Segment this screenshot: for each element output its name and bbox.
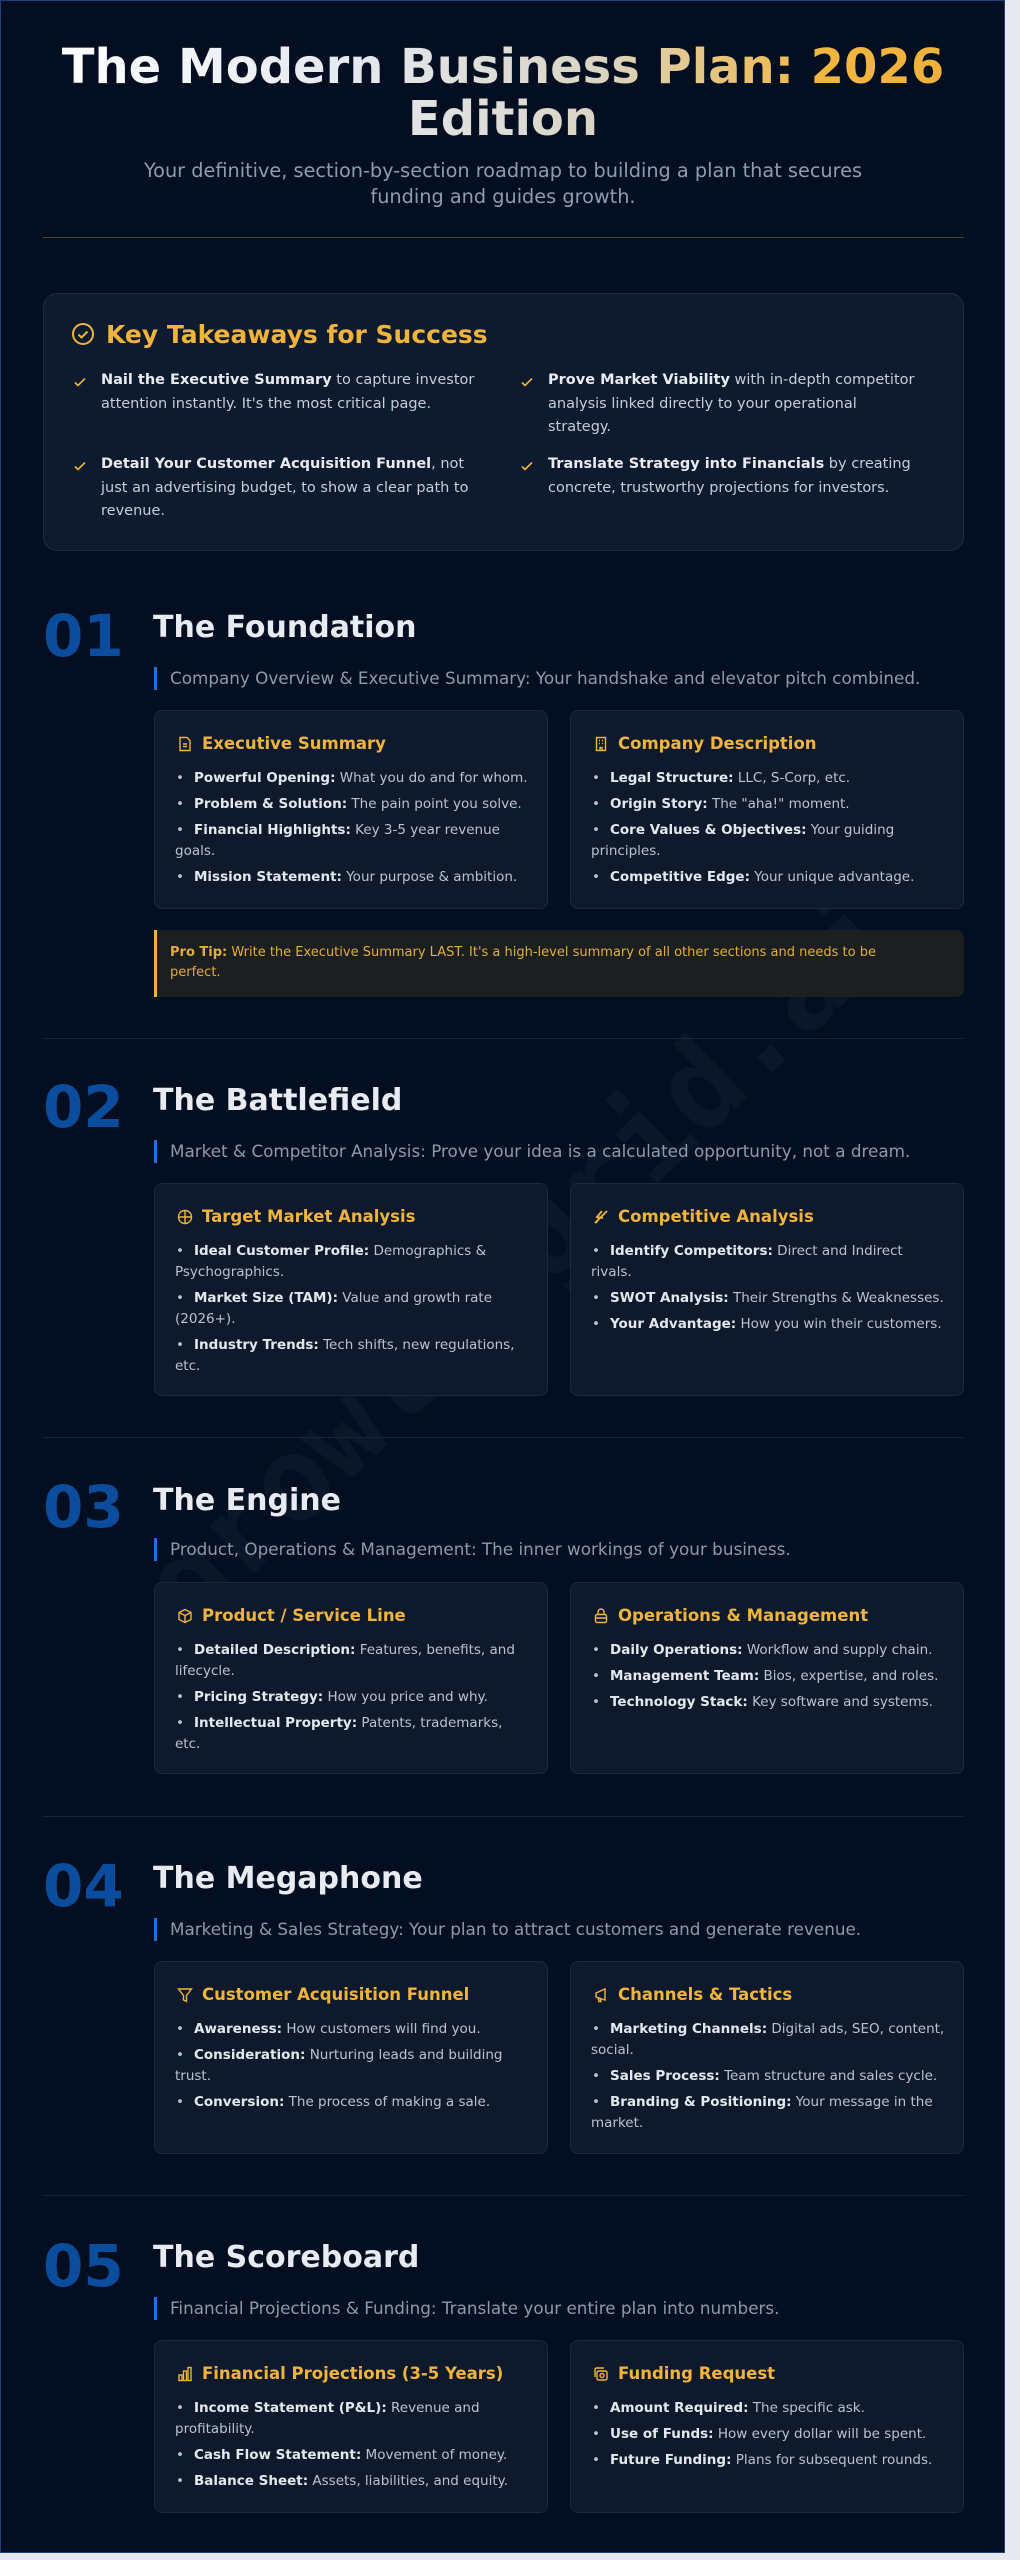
card: channels & tactics: Channels & Tactics (618, 1985, 792, 2004)
card: funding request: Use of Funds: How every dollar will be spent. (610, 2426, 926, 2442)
card: company description: • (592, 869, 600, 885)
card: target market analysis: etc. (175, 1358, 200, 1374)
subtitle (144, 159, 862, 208)
card: competitive analysis: rivals. (591, 1264, 632, 1280)
callout: pro tip: Pro Tip: Write the Executive Summary LAST. It's a high-level summary of all other sections and needs to be (170, 945, 876, 960)
section subtitle 01: Company Overview & Executive Summary: Your handshake and elevator pitch combined. (170, 668, 920, 688)
takeaway 4: concrete, trustworthy projections for investors. (548, 480, 889, 496)
card: financial projections: Balance Sheet: Assets, liabilities, and equity. (194, 2473, 508, 2489)
card: company description: • (592, 770, 600, 786)
card: target market analysis: Market Size (TAM): Value and growth rate (194, 1290, 492, 1306)
number 04: 04 (43, 1852, 124, 1920)
card: competitive analysis: Competitive Analysis (618, 1207, 814, 1226)
callout: pro tip: perfect. (170, 965, 221, 980)
card: executive summary: goals. (175, 843, 215, 859)
card: product / service line: • (176, 1642, 184, 1658)
card: funding request: • (592, 2400, 600, 2416)
card: operations & management: Technology Stack: Key software and systems. (610, 1694, 933, 1710)
takeaway 3 (74, 456, 468, 519)
title (41, 41, 965, 145)
section subtitle 05: Financial Projections & Funding: Translate your entire plan into numbers. (170, 2298, 780, 2318)
card: product / service line: Intellectual Property: Patents, trademarks, (194, 1715, 502, 1731)
card: funding request: Funding Request (618, 2364, 775, 2383)
card: competitive analysis: • (592, 1316, 600, 1332)
card: customer acquisition funnel: • (176, 2047, 184, 2063)
number 01: 01 (43, 602, 124, 670)
card: target market analysis: Ideal Customer Profile: Demographics & (194, 1243, 486, 1259)
takeaway 2: strategy. (548, 419, 611, 435)
section subtitle 02: Market & Competitor Analysis: Prove your idea is a calculated opportunity, not a dream. (170, 1141, 910, 1161)
title: The Modern Business Plan: 2026 (62, 39, 944, 95)
card: operations & management (570, 1582, 964, 1774)
heading: The Engine: The Engine (153, 1483, 341, 1518)
card: funding request: • (592, 2452, 600, 2468)
card: operations & management: • (592, 1668, 600, 1684)
card: channels & tactics: • (592, 2068, 600, 2084)
subtitle: funding and guides growth. (370, 185, 636, 208)
title: Edition (408, 91, 598, 147)
card: channels & tactics: • (592, 2021, 600, 2037)
card: company description (570, 710, 964, 909)
takeaway 2 (522, 372, 914, 435)
callout: pro tip (154, 930, 964, 997)
takeaway 4 (522, 456, 911, 496)
section subtitle 04: Marketing & Sales Strategy: Your plan to attract customers and generate revenue. (170, 1919, 861, 1939)
card: company description: Legal Structure: LLC, S-Corp, etc. (610, 770, 850, 786)
number 02: 02 (43, 1073, 124, 1141)
card: financial projections: profitability. (175, 2421, 255, 2437)
card: company description: principles. (591, 843, 661, 859)
card: customer acquisition funnel: • (176, 2021, 184, 2037)
card: product / service line (154, 1582, 548, 1774)
card: product / service line: Pricing Strategy: How you price and why. (194, 1689, 488, 1705)
card: financial projections: Cash Flow Statement: Movement of money. (194, 2447, 507, 2463)
card: financial projections: • (176, 2447, 184, 2463)
card: customer acquisition funnel: Awareness: How customers will find you. (194, 2021, 481, 2037)
takeaway 2: Prove Market Viability with in-depth competitor (548, 372, 914, 388)
subtitle: Your definitive, section-by-section roadmap to building a plan that secures (144, 159, 862, 182)
card: executive summary: Financial Highlights: Key 3-5 year revenue (194, 822, 500, 838)
takeaway 3: just an advertising budget, to show a clear path to (101, 480, 468, 496)
card: company description: Company Description (618, 734, 817, 753)
card: target market analysis (154, 1183, 548, 1396)
takeaway 3: revenue. (101, 503, 165, 519)
card: competitive analysis: • (592, 1243, 600, 1259)
card: target market analysis: • (176, 1337, 184, 1353)
card: target market analysis: Psychographics. (175, 1264, 284, 1280)
card: financial projections (154, 2340, 548, 2513)
card: financial projections: Financial Projections (3-5 Years) (202, 2364, 503, 2383)
heading: The Scoreboard: The Scoreboard (153, 2240, 419, 2275)
card: customer acquisition funnel: Conversion: The process of making a sale. (194, 2094, 490, 2110)
card: operations & management: Daily Operations: Workflow and supply chain. (610, 1642, 932, 1658)
card: operations & management: • (592, 1694, 600, 1710)
card: operations & management: • (592, 1642, 600, 1658)
section subtitle 03: Product, Operations & Management: The inner workings of your business. (170, 1539, 791, 1559)
card: target market analysis: Industry Trends: Tech shifts, new regulations, (194, 1337, 514, 1353)
card: target market analysis: • (176, 1290, 184, 1306)
card: executive summary: • (176, 770, 184, 786)
card: competitive analysis: Identify Competitors: Direct and Indirect (610, 1243, 903, 1259)
card: company description: Competitive Edge: Your unique advantage. (610, 869, 914, 885)
card: financial projections: • (176, 2400, 184, 2416)
card: executive summary: • (176, 869, 184, 885)
takeaway 1: Nail the Executive Summary to capture investor (101, 372, 474, 388)
heading: key takeaways: Key Takeaways for Success (106, 320, 488, 349)
watermark: growth-grid.ai (115, 864, 926, 1654)
card: customer acquisition funnel: Customer Acquisition Funnel (202, 1985, 469, 2004)
takeaway 1: attention instantly. It's the most critical page. (101, 396, 431, 412)
card: customer acquisition funnel: trust. (175, 2068, 211, 2084)
heading: The Megaphone: The Megaphone (153, 1861, 423, 1896)
card: target market analysis: (2026+). (175, 1311, 236, 1327)
number 03: 03 (43, 1473, 124, 1541)
card: company description: Origin Story: The "aha!" moment. (610, 796, 850, 812)
card: operations & management: Operations & Management (618, 1606, 868, 1625)
card: company description: • (592, 822, 600, 838)
card: funding request: Amount Required: The specific ask. (610, 2400, 865, 2416)
card: competitive analysis: SWOT Analysis: Their Strengths & Weaknesses. (610, 1290, 944, 1306)
card: customer acquisition funnel: • (176, 2094, 184, 2110)
card: channels & tactics: social. (591, 2042, 634, 2058)
card: customer acquisition funnel: Consideration: Nurturing leads and building (194, 2047, 502, 2063)
takeaway 1 (74, 372, 474, 412)
card: executive summary: Problem & Solution: The pain point you solve. (194, 796, 522, 812)
card: product / service line: Product / Service Line (202, 1606, 406, 1625)
card: financial projections: • (176, 2473, 184, 2489)
card: product / service line: • (176, 1689, 184, 1705)
card: channels & tactics: Sales Process: Team structure and sales cycle. (610, 2068, 937, 2084)
takeaway 3: Detail Your Customer Acquisition Funnel, not (101, 456, 464, 472)
card: company description: Core Values & Objectives: Your guiding (610, 822, 894, 838)
panel: key takeaways (43, 293, 964, 551)
card: competitive analysis (570, 1183, 964, 1396)
card: channels & tactics: market. (591, 2115, 643, 2131)
card: executive summary: • (176, 796, 184, 812)
card: funding request: Future Funding: Plans for subsequent rounds. (610, 2452, 932, 2468)
card: target market analysis: Target Market Analysis (202, 1207, 415, 1226)
card: funding request: • (592, 2426, 600, 2442)
card: channels & tactics: Branding & Positioning: Your message in the (610, 2094, 933, 2110)
card: executive summary: Mission Statement: Your purpose & ambition. (194, 869, 517, 885)
card: executive summary (154, 710, 548, 909)
card: product / service line: etc. (175, 1736, 200, 1752)
number 05: 05 (43, 2232, 124, 2300)
takeaway 4: Translate Strategy into Financials by creating (548, 456, 911, 472)
card: customer acquisition funnel (154, 1961, 548, 2154)
card: executive summary: Powerful Opening: What you do and for whom. (194, 770, 528, 786)
card: executive summary: Executive Summary (202, 734, 386, 753)
card: competitive analysis: • (592, 1290, 600, 1306)
card: operations & management: Management Team: Bios, expertise, and roles. (610, 1668, 938, 1684)
card: channels & tactics: Marketing Channels: Digital ads, SEO, content, (610, 2021, 944, 2037)
card: target market analysis: • (176, 1243, 184, 1259)
card: product / service line: • (176, 1715, 184, 1731)
card: company description: • (592, 796, 600, 812)
card: channels & tactics: • (592, 2094, 600, 2110)
heading: The Foundation: The Foundation (153, 610, 417, 645)
takeaway 2: analysis linked directly to your operational (548, 396, 857, 412)
card: channels & tactics (570, 1961, 964, 2154)
card: product / service line: Detailed Description: Features, benefits, and (194, 1642, 515, 1658)
card: financial projections: Income Statement (P&L): Revenue and (194, 2400, 480, 2416)
card: product / service line: lifecycle. (175, 1663, 235, 1679)
card: funding request (570, 2340, 964, 2513)
heading: The Battlefield: The Battlefield (153, 1083, 402, 1118)
card: competitive analysis: Your Advantage: How you win their customers. (610, 1316, 942, 1332)
card: executive summary: • (176, 822, 184, 838)
